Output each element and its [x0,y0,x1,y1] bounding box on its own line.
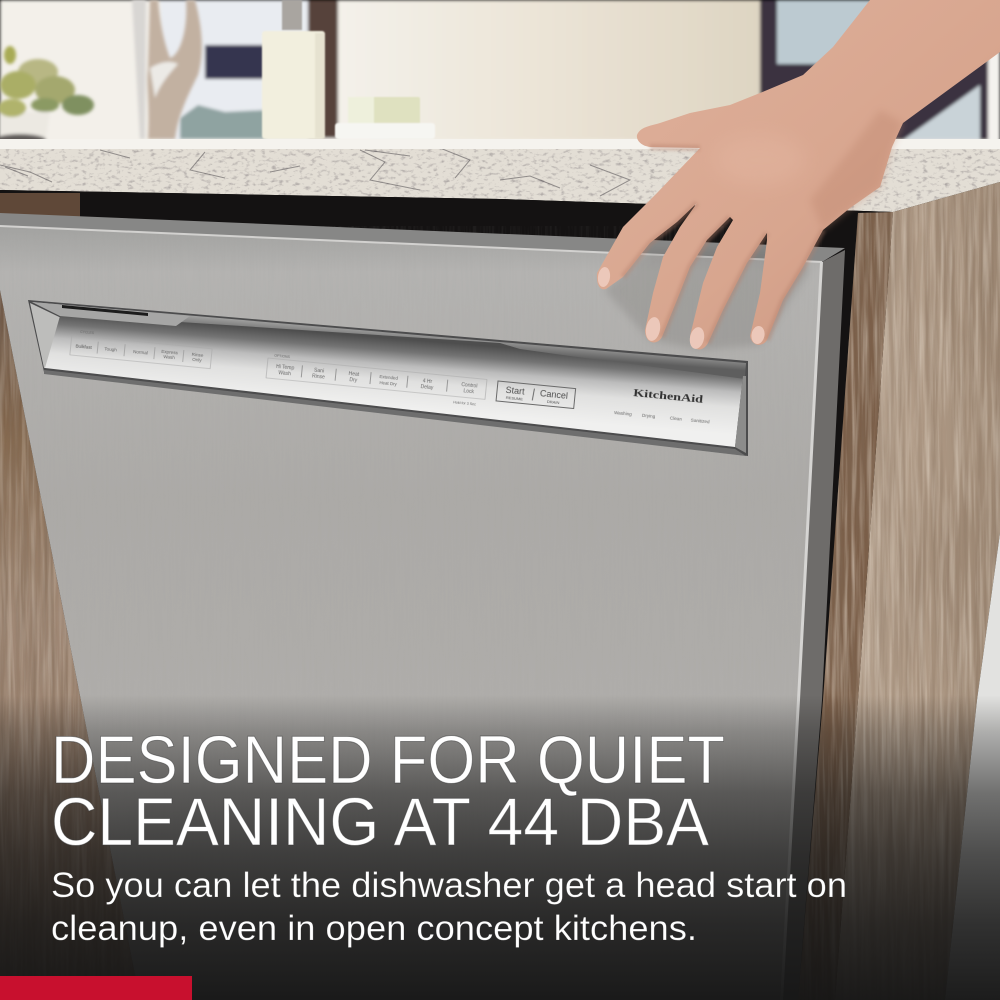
right side wall [735,376,746,453]
soap bar on dish [335,97,435,139]
wrist shading [810,110,903,230]
cabinet edge [798,212,893,1000]
fingernails [597,266,766,350]
wood cabinet, right [795,180,1000,1000]
brand logo: KitchenAid [633,388,704,406]
panel: start and cancel buttons [496,381,576,409]
panel: option buttons: Dry [349,377,358,384]
status labels [614,410,710,424]
panel: start and cancel buttons: Start [505,385,526,397]
title: CLEANING AT 44 DBA [51,784,710,860]
panel: option buttons: Hi Temp [276,364,295,372]
panel: cycle buttons: Tough [104,346,118,352]
lower lip [44,370,746,456]
body text [51,866,847,948]
recess shell [28,300,748,456]
control panel recess [28,300,748,456]
status labels: Clean [670,415,683,422]
plant in a white pot [0,46,94,146]
panel: option buttons: Hold for 3 Sec [453,400,476,407]
door right bevel [780,250,845,1000]
panel: cycle buttons: Only [192,357,203,363]
panel: cycle buttons: Express [161,349,179,355]
faucet [132,0,202,139]
panel: option buttons: Lock [463,388,475,395]
panel face [45,316,743,447]
wood panel under the counter, left [0,193,80,217]
panel: option buttons: Delay [420,384,434,391]
panel: start and cancel buttons: RESUME [506,395,523,402]
upper lip, left section [32,302,190,326]
door top edge [0,213,845,262]
hand shadow on door [604,250,810,350]
panel: option buttons: Heat [348,371,360,378]
dark gradient overlay [0,695,1000,1000]
door front [0,226,822,1000]
countertop [0,139,1000,215]
status labels: Drying [642,413,656,419]
body text: cleanup, even in open concept kitchens. [51,909,697,948]
brushed steel texture [0,226,822,1000]
panel: cycle buttons: Normal [133,349,148,355]
panel: start and cancel buttons: DRAIN [547,399,560,405]
panel: option buttons: Rinse [312,373,325,381]
red accent bar [0,976,192,1000]
panel: option buttons: Heat Dry [379,380,398,387]
bevel highlight [780,262,823,1000]
finger shading [623,147,823,343]
wood cabinet, left [0,290,135,976]
panel: cycle buttons: CYCLES [80,330,95,335]
title: DESIGNED FOR QUIET [51,722,725,798]
panel: option buttons: Wash [278,370,291,377]
panel: option buttons: 4 Hr [422,378,433,385]
panel: cycle buttons: Wash [163,354,176,360]
panel: cycle buttons: Rinse [191,352,204,358]
upper lip [32,302,746,379]
icon: hand resting on the door [597,0,1000,350]
panel: option buttons: Extended [379,374,399,381]
panel: option buttons: OPTIONS [274,354,291,359]
body text: So you can let the dishwasher get a head start on [51,866,847,905]
status labels: Sanitized [691,418,710,424]
soap dispenser [262,0,325,139]
dark gap under the counter [0,190,893,1000]
panel: option buttons: Sani [314,368,324,375]
bright room behind the cabinet [945,533,1000,1000]
panel: start and cancel buttons: Cancel [540,388,568,401]
background: kitchen wall and window [0,0,1000,150]
panel: option buttons: Control [461,382,478,390]
panel: cycle buttons [70,329,213,369]
back of hand highlight [714,134,806,186]
title [51,722,725,860]
dishwasher door [0,213,845,1000]
panel: option buttons [265,353,487,407]
left side wall [30,303,76,368]
hand and arm [597,0,1000,349]
handle slot [62,305,148,316]
cabinet face [835,182,1000,1000]
door top highlight [0,225,822,263]
status labels: Washing [614,410,632,417]
panel: cycle buttons: Bulkfast [75,343,93,350]
